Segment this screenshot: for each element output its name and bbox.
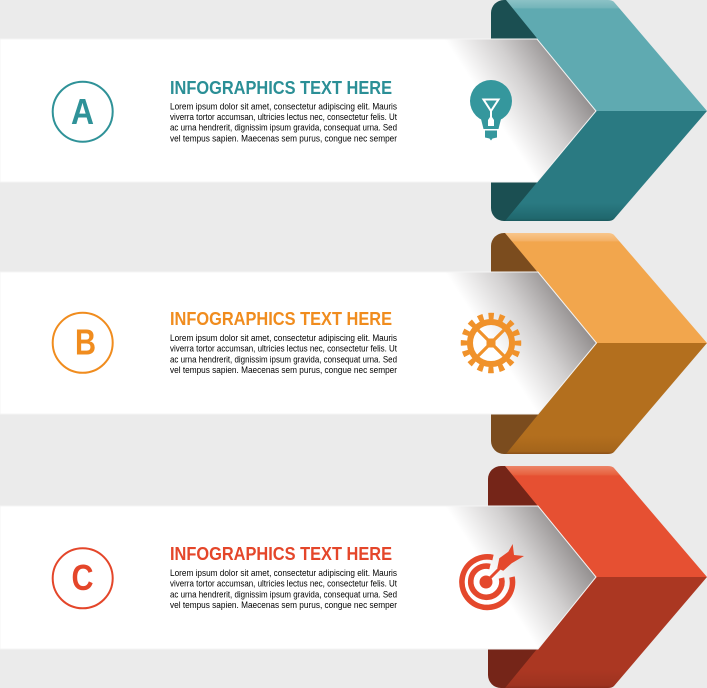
body text A [170, 101, 397, 143]
chevron B lower face [506, 343, 707, 454]
letter badge C [53, 548, 113, 608]
body text B: Lorem ipsum dolor sit amet, consectetur adipiscing elit. Mauris [170, 333, 397, 343]
band B [0, 272, 596, 414]
icon: target with arrow [462, 544, 524, 607]
icon: light bulb [470, 80, 512, 140]
body text C [170, 568, 397, 610]
panel: B [0, 233, 707, 454]
heading C: INFOGRAPHICS TEXT HERE [170, 544, 392, 564]
letter badge B [53, 313, 113, 373]
chevron A lower face [505, 111, 707, 221]
letter badge B: B [75, 322, 96, 362]
chevron B upper face [505, 233, 707, 343]
body text C: ac urna hendrerit, dignissim ipsum gravida, consequat urna. Sed [170, 589, 397, 599]
band A [0, 39, 596, 182]
chevron B back [491, 233, 581, 454]
letter badge C: C [72, 557, 94, 598]
chevron C lower face [505, 577, 707, 688]
body text A: vel tempus sapien. Maecenas sem purus, congue nec semper [170, 133, 397, 143]
body text B: vel tempus sapien. Maecenas sem purus, congue nec semper [170, 365, 397, 375]
body text A: Lorem ipsum dolor sit amet, consectetur adipiscing elit. Mauris [170, 101, 397, 111]
letter badge A: A [71, 91, 94, 132]
panel: C [0, 466, 707, 688]
body text C: viverra tortor accumsan, ultricies lectus nec, consectetur felis. Ut [170, 579, 397, 589]
body text A: ac urna hendrerit, dignissim ipsum gravida, consequat urna. Sed [170, 123, 397, 133]
chevron A upper face [506, 0, 707, 111]
chevron C back [488, 466, 578, 688]
band C [0, 506, 596, 649]
chevron C upper face [505, 466, 707, 577]
panel: A [0, 0, 707, 221]
body text C: Lorem ipsum dolor sit amet, consectetur adipiscing elit. Mauris [170, 568, 397, 578]
body text B: ac urna hendrerit, dignissim ipsum gravida, consequat urna. Sed [170, 354, 397, 364]
heading A: INFOGRAPHICS TEXT HERE [170, 78, 392, 98]
icon: gear [464, 316, 518, 370]
chevron A back [491, 0, 581, 221]
body text B: viverra tortor accumsan, ultricies lectus nec, consectetur felis. Ut [170, 344, 397, 354]
body text C: vel tempus sapien. Maecenas sem purus, congue nec semper [170, 600, 397, 610]
body text B [170, 333, 397, 375]
heading B: INFOGRAPHICS TEXT HERE [170, 309, 392, 329]
letter badge A [53, 82, 113, 142]
body text A: viverra tortor accumsan, ultricies lectus nec, consectetur felis. Ut [170, 112, 397, 122]
